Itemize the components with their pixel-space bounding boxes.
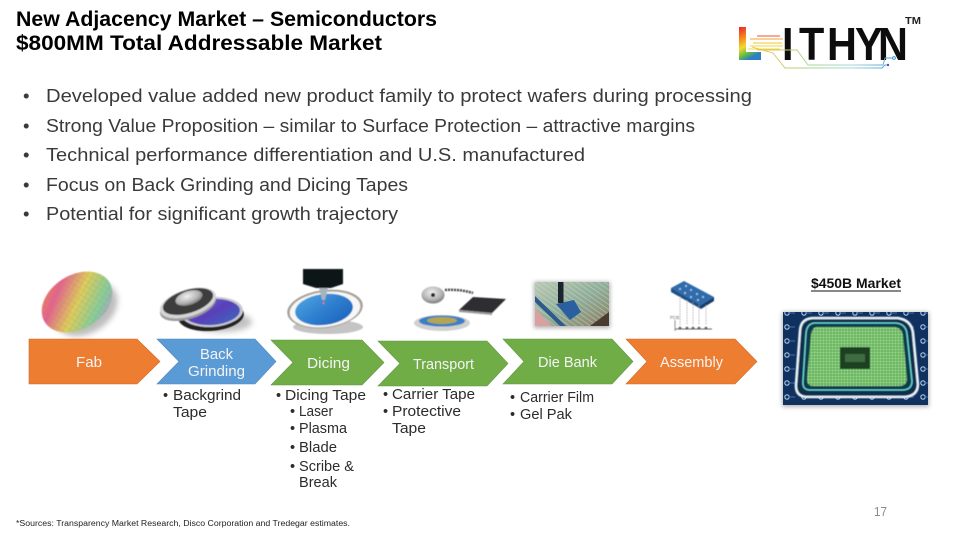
list: dicing: • xyxy=(290,440,295,456)
list: dicing: • xyxy=(290,404,295,420)
bullet list: • xyxy=(23,144,29,165)
list: transport: Protective xyxy=(392,404,461,420)
list: dicing: Break xyxy=(299,475,338,491)
list: die bank: • xyxy=(510,407,515,423)
page number: 17 xyxy=(874,504,887,519)
bullet list: Developed value added new product family to protect wafers during processing xyxy=(46,85,752,106)
list: die bank: Gel Pak xyxy=(520,407,573,423)
sources footnote: *Sources: Transparency Market Research, Disco Corporation and Tredegar estimates. xyxy=(16,519,350,528)
list: dicing: • xyxy=(276,388,281,404)
list: transport: • xyxy=(383,387,388,403)
chevron: Transport xyxy=(378,341,508,386)
list: die bank: • xyxy=(510,390,515,406)
list: back grinding: Tape xyxy=(173,405,207,421)
list: dicing: Blade xyxy=(299,440,337,456)
process chevrons xyxy=(29,339,757,386)
title: New Adjacency Market – Semiconductors xyxy=(16,8,437,31)
list: dicing: Laser xyxy=(299,404,333,420)
icon: back grinding wafer holder xyxy=(156,282,252,333)
market label: $450B Market xyxy=(811,276,902,291)
title: $800MM Total Addressable Market xyxy=(16,32,382,55)
chevron: Dicing xyxy=(271,340,384,385)
logo: Lithyn xyxy=(739,15,921,71)
bullet list: • xyxy=(23,115,29,136)
list: dicing: Dicing Tape xyxy=(285,388,366,404)
icon: transport reel, tray and carrier xyxy=(414,286,506,331)
list: dicing: • xyxy=(290,421,295,437)
list: transport: Carrier Tape xyxy=(392,387,475,403)
bullet list: • xyxy=(23,203,29,224)
chevron: Fab xyxy=(29,339,160,384)
chevron: Assembly xyxy=(626,339,757,384)
chevron: Dicing: Dicing xyxy=(307,356,350,372)
image: microchip xyxy=(782,312,929,407)
list: transport xyxy=(383,387,475,437)
title xyxy=(16,8,437,55)
bullet list: • xyxy=(23,174,29,195)
list: back grinding: • xyxy=(163,388,168,404)
bullet list: Potential for significant growth trajectory xyxy=(46,203,399,224)
chevron: Die Bank xyxy=(503,339,633,384)
chevron: Transport: Transport xyxy=(413,357,474,373)
chevron: Fab: Fab xyxy=(76,355,102,371)
list: dicing: Scribe & xyxy=(299,459,354,475)
icon: assembly PCB die: PCB xyxy=(670,315,679,320)
list: transport: • xyxy=(383,404,388,420)
logo: Lithyn: TM xyxy=(905,15,921,27)
icon: rainbow wafer xyxy=(30,259,128,347)
list: transport: Tape xyxy=(392,421,426,437)
list: die bank xyxy=(510,390,594,423)
chevron: Back Grinding xyxy=(157,339,276,384)
list: dicing: • xyxy=(290,459,295,475)
list: dicing: Plasma xyxy=(299,421,348,437)
bullet list: • xyxy=(23,85,29,106)
chevron: Back Grinding: Back xyxy=(200,347,234,363)
list: back grinding: Backgrind xyxy=(173,388,241,404)
icon: dicing wafer and head xyxy=(285,269,365,334)
logo: Lithyn: ITHYN xyxy=(782,19,908,71)
list: dicing xyxy=(276,388,366,491)
bullet list: Focus on Back Grinding and Dicing Tapes xyxy=(46,174,408,195)
chevron: Back Grinding: Grinding xyxy=(188,364,245,380)
bullet list xyxy=(23,85,752,224)
chevron: Die Bank: Die Bank xyxy=(538,355,598,371)
list: back grinding xyxy=(163,388,241,421)
icon: assembly PCB die xyxy=(670,281,714,331)
chevron: Assembly: Assembly xyxy=(660,355,724,371)
icon: die bank photo xyxy=(534,282,610,328)
bullet list: Technical performance differentiation and U.S. manufactured xyxy=(46,144,585,165)
list: die bank: Carrier Film xyxy=(520,390,594,406)
bullet list: Strong Value Proposition – similar to Surface Protection – attractive margins xyxy=(46,115,695,136)
